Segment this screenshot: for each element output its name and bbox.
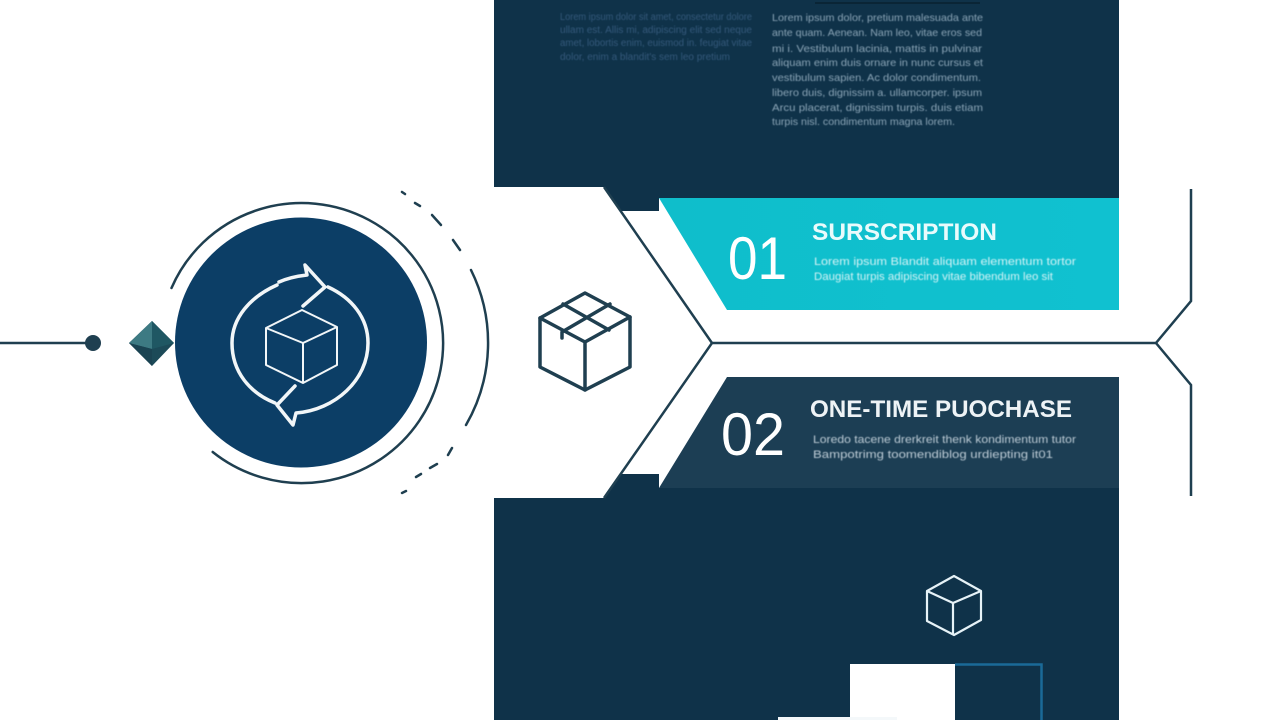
heading: one-time purchase: ONE-TIME PUOCHASE — [810, 396, 1072, 423]
text block: faint left column: dolor, enim a blandit's sem leo pretium — [560, 52, 730, 63]
icon: diamond marker — [129, 321, 174, 366]
heading: subscription: SURSCRIPTION — [812, 219, 997, 246]
icon: circular arrows — [232, 265, 368, 425]
text block: faint left column — [560, 12, 752, 63]
chevron connector: line from chevron to right bracket — [604, 187, 1191, 498]
orbit rings around central circle — [172, 192, 488, 493]
bar chart: stepped blocks — [778, 664, 1042, 720]
icon: small cube on bottom panel — [927, 576, 981, 635]
text block: one-time description: Bampotrimg toomendiblog urdiepting it01 — [813, 449, 1053, 461]
text block: subscription description — [814, 256, 1076, 283]
number 02: 02 — [721, 401, 785, 468]
central circle with recycle box icon — [175, 218, 427, 468]
text block: right column: libero duis, dignissim a. ullamcorper. ipsum — [772, 87, 982, 99]
icon: cube — [266, 310, 337, 383]
panel: 02 one-time purchase — [659, 377, 1119, 488]
text block: right column — [772, 12, 983, 128]
text block: right column: turpis nisl. condimentum magna lorem. — [772, 116, 955, 128]
text block: faint left column: amet, lobortis enim, euismod in. feugiat vitae — [560, 38, 752, 49]
text block: one-time description — [813, 434, 1076, 461]
icon: parcel box — [540, 293, 630, 390]
text block: right column: Lorem ipsum dolor, pretium malesuada ante — [772, 12, 983, 24]
text block: right column: vestibulum sapien. Ac dolor condimentum. — [772, 72, 981, 84]
connector: left line with dot — [0, 335, 101, 351]
text block: right column: aliquam enim duis ornare in nunc cursus et — [772, 57, 983, 69]
text block: faint left column: ullam est. Allis mi, adipiscing elit sed neque — [560, 25, 752, 36]
text block: right column: mi i. Vestibulum lacinia, mattis in pulvinar — [772, 43, 983, 55]
text block: one-time description: Loredo tacene drerkreit thenk kondimentum tutor — [813, 434, 1076, 446]
text block: subscription description: Lorem ipsum Blandit aliquam elementum tortor — [814, 256, 1076, 268]
panel: dark top text panel — [494, 0, 1119, 187]
panel wedges: dark joins beside the chevron — [604, 187, 1119, 498]
text block: right column: Arcu placerat, dignissim turpis. duis etiam — [772, 102, 983, 114]
text block: faint left column: Lorem ipsum dolor sit amet, consectetur dolore — [560, 12, 752, 23]
number 01: 01 — [728, 225, 787, 292]
panel: 01 subscription — [659, 198, 1119, 310]
text block: subscription description: Daugiat turpis adipiscing vitae bibendum leo sit — [814, 271, 1053, 283]
panel: dark bottom panel — [494, 498, 1119, 720]
text block: right column: ante quam. Aenean. Nam leo, vitae eros sed — [772, 27, 982, 39]
